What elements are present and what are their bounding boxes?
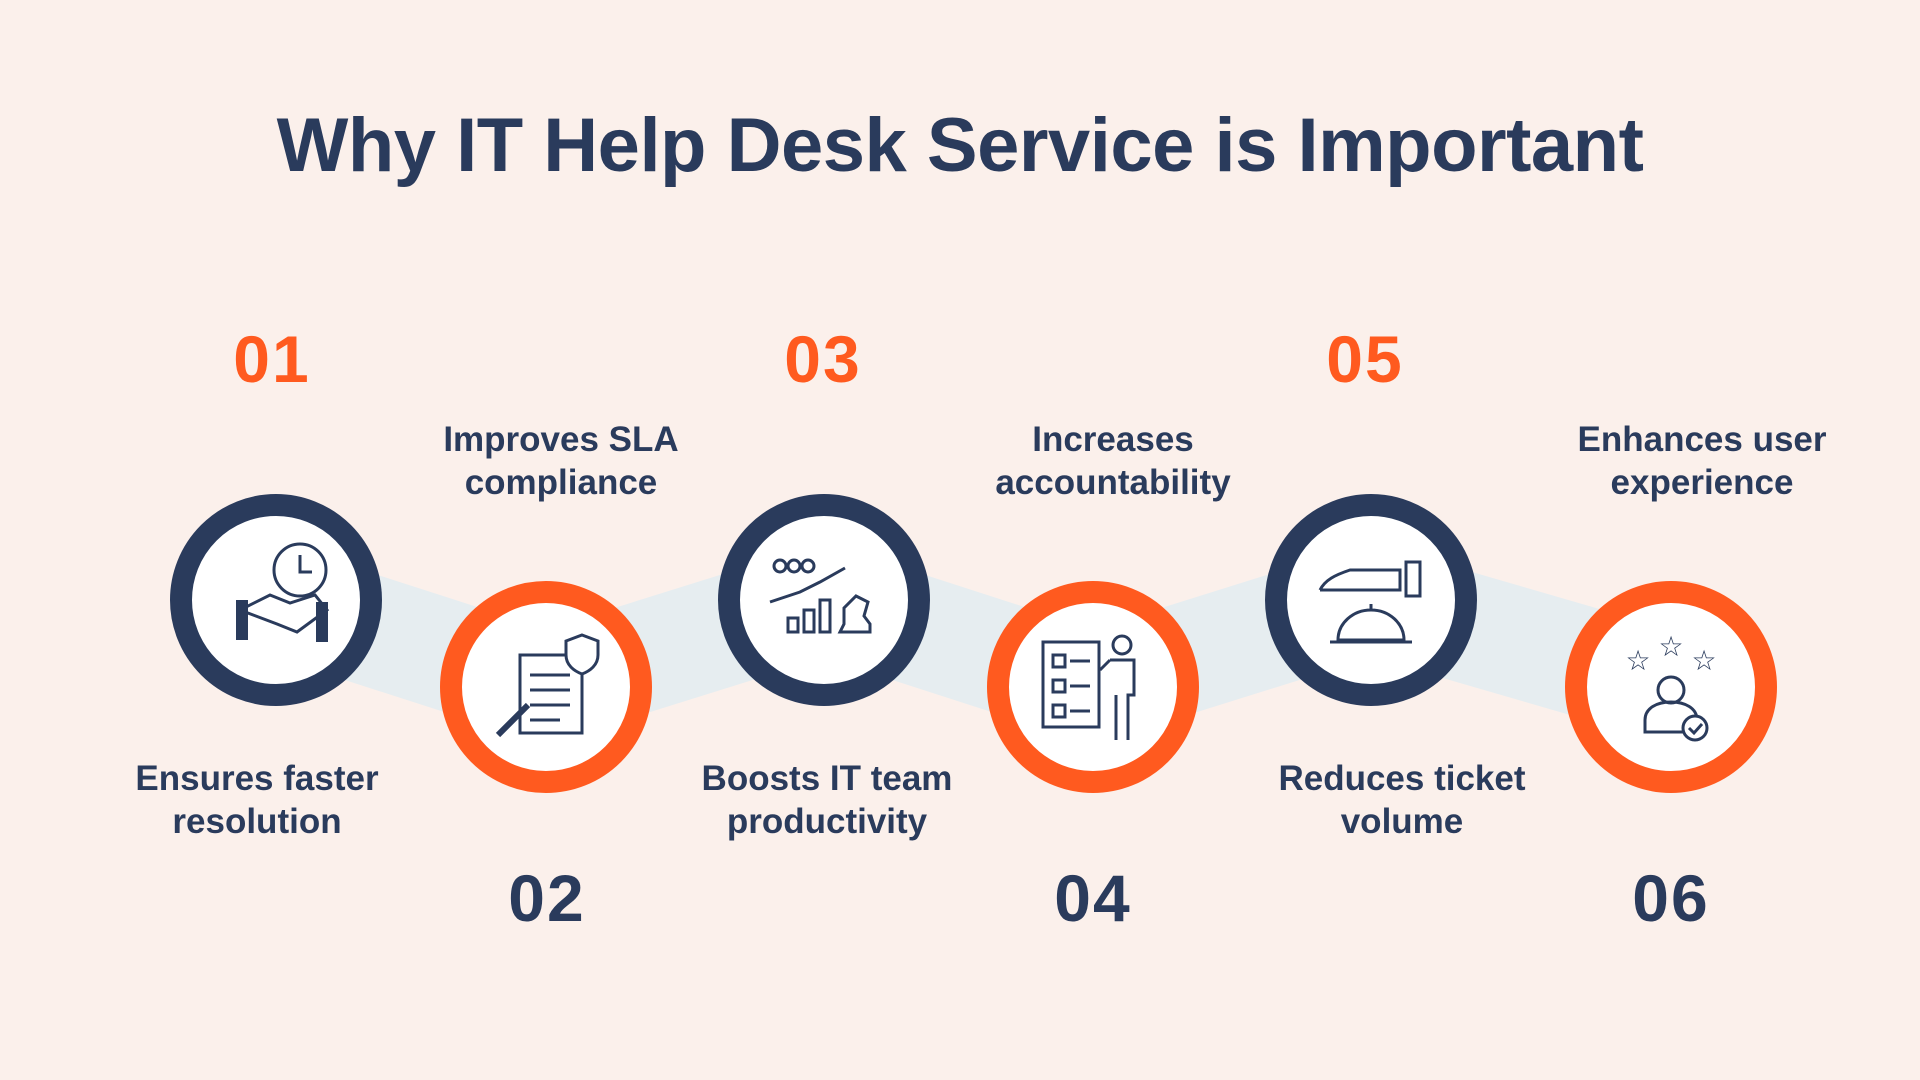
label 2: compliance (465, 463, 657, 502)
label 3 (702, 759, 952, 841)
circle 6: ☆ (1691, 645, 1717, 676)
circle 1 (181, 505, 371, 695)
label 6: Enhances user (1578, 420, 1826, 459)
number 03: 03 (784, 322, 862, 396)
circle 6: ☆ (1625, 645, 1651, 676)
label 5: Reduces ticket (1278, 759, 1526, 798)
number 04: 04 (1054, 861, 1132, 935)
circle 6: ☆ (1658, 631, 1684, 662)
label 3: productivity (727, 802, 927, 841)
label 6: experience (1611, 463, 1793, 502)
circle 2 (451, 592, 641, 782)
number 01: 01 (233, 322, 311, 396)
number 06: 06 (1632, 861, 1710, 935)
title: Why IT Help Desk Service is Important (277, 103, 1643, 188)
label 4: accountability (995, 463, 1231, 502)
label 1: resolution (172, 802, 342, 841)
label 2 (443, 420, 679, 502)
number 02: 02 (508, 861, 586, 935)
label 5 (1278, 759, 1526, 841)
label 3: Boosts IT team (702, 759, 952, 798)
number 05: 05 (1326, 322, 1404, 396)
circle 4 (998, 592, 1188, 782)
label 6 (1578, 420, 1826, 502)
label 2: Improves SLA (443, 420, 679, 459)
label 1 (135, 759, 379, 841)
circle 6 (1576, 592, 1766, 782)
label 5: volume (1341, 802, 1463, 841)
label 4 (995, 420, 1231, 502)
label 1: Ensures faster (135, 759, 379, 798)
circle 3 (729, 505, 919, 695)
circle 5 (1276, 505, 1466, 695)
label 4: Increases (1032, 420, 1194, 459)
